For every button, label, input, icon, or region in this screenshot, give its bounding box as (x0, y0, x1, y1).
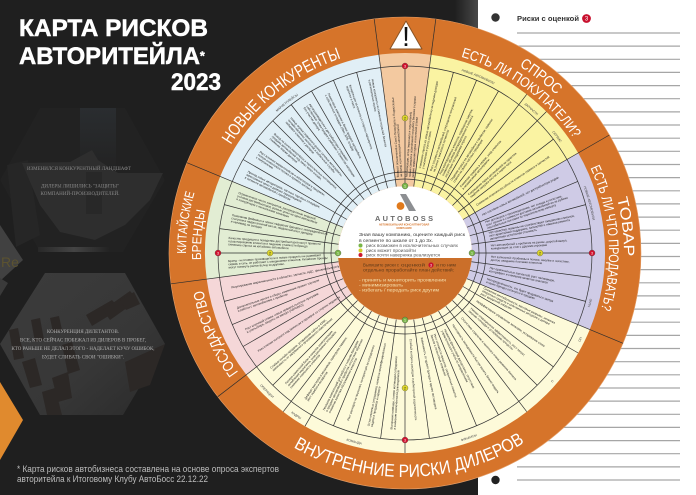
title: 2023 (171, 69, 221, 96)
text: new competitors segment risks: Конкуренция за клиента со стороны каршеринга, (348, 84, 374, 150)
text: warning segment risks: новые санкции и ограничения на работу бизнеса в стране (408, 96, 417, 177)
text block: competition of amateurs: ВСЕ, КТО СЕЙЧАС ПОБЕЖАЛ ИЗ ДИЛЕРОВ В ПРОБЕГ, (20, 336, 147, 344)
footnote: * Карта рисков автобизнеса составлена на основе опроса экспертов (17, 464, 279, 474)
text block: competition of amateurs: БУДЕТ СЛИВАТЬ СВОИ "ОШИБКИ". (42, 354, 124, 360)
text: internal dealer risks, left part: кадров в продажах и сервисе (370, 386, 382, 427)
panel: dark left background (0, 0, 478, 495)
heading: demand: ЕСТЬ ЛИ ПОКУПАТЕЛИ? (462, 48, 581, 136)
risk score markers: 3 (591, 251, 593, 255)
text: product segment risks (481, 176, 576, 306)
text block: changed competitive landscape (27, 164, 132, 197)
text block: competition of amateurs (12, 329, 155, 360)
text: chinese brands segment risks: статусом и недостаточной сетью, неудачный опыт дилеров (231, 216, 313, 236)
text: product segment risks: Нет качества: машины не соответствуют ожиданиям клиентов, (488, 214, 575, 235)
image: falling wooden blocks in hexagon (0, 273, 165, 415)
text: product segment risks: рост сроков и стоимости доставки автомобилей из-за рубежа (486, 195, 569, 227)
text: new competitors segment risks (244, 79, 388, 215)
risk score markers: 2 (404, 386, 406, 390)
text: demand segment risks: отсутствие господдержки спроса (444, 135, 468, 178)
text: action plan: оценкой (401, 262, 426, 268)
text: internal dealer risks, left part: и продажи автомобилей с пробегом, отсутствие обучения (325, 338, 364, 412)
text: product segment risks: долгое ожидание поставки клиентом (491, 258, 542, 265)
segment: government (207, 262, 352, 375)
outer-band small labels: НОВЫЕ АВТОМОБИЛИ (584, 186, 595, 220)
icon: warning triangle: ! (402, 21, 410, 52)
risk score markers: 1 (337, 251, 339, 255)
icon: warning triangle (390, 21, 422, 52)
text: action plan: 3 (430, 264, 432, 268)
risk score markers (215, 63, 595, 443)
text: action plan: - избегать / передать риск другим (359, 288, 439, 292)
text: internal dealer risks, right part: Снижение рентабельности, кассовые разрывы, нехватка (483, 286, 556, 325)
text: new competitors segment risks: Новые игроки сервисного рынка: сетевые автосервисы, (289, 116, 344, 178)
text: internal dealer risks, left part: снижение лояльности клиентов (289, 353, 321, 389)
segment: chinese brands (205, 176, 343, 279)
text block: competition of amateurs: КТО РАНЬШЕ НЕ ДЕЛАЛ ЭТОГО - НАДЕЛАЕТ КУЧУ ОШИБОК, (12, 346, 155, 352)
text: internal dealer risks, right part: Зависимость от одного бренда и одного поставщика (420, 337, 438, 410)
panel: centre circle (338, 186, 472, 320)
segment: demand (414, 55, 578, 220)
outer-band small labels: ЗАПЧ (588, 298, 592, 308)
text: government segment risks: и утильсбора, запреты на импорт (АВТОВАЗ) (246, 303, 304, 334)
risk score markers: 1 (404, 184, 406, 188)
text: internal dealer risks, left part: Слабые онлайн-продажи, устаревшие сайты и CRM, (269, 318, 327, 370)
text: internal dealer risks, left part: снижение качества обслуживания клиентов (328, 357, 358, 414)
text: internal dealer risks, right part: Низкая операционная эффективность, рост затрат, (470, 307, 526, 357)
outer-band small labels: КАДРЫ (291, 411, 302, 419)
text: new competitors segment risks: снижение маржи дилеров (269, 137, 299, 164)
segment: internal dealer risks (246, 279, 590, 453)
text: internal dealer risks, left part: Потеря клиентской базы и каналов коммуникации, (284, 329, 334, 385)
risk score markers: 3 (404, 64, 406, 68)
legend: risk scores (358, 243, 459, 258)
text: warning segment risks: Мобилизация, отток персонала и покупателей, (404, 111, 413, 177)
text: internal dealer risks, right part (409, 286, 556, 421)
footnote: авторитейла к Итоговому Клубу АвтоБосс 22.12.22 (17, 474, 208, 484)
heading: product: ЕСТЬ ЛИ ЧТО ПРОДАВАТЬ? (590, 164, 619, 311)
outer-band small labels: П (551, 380, 554, 383)
text: product segment risks: и какие бренды останутся в продаже (485, 280, 536, 300)
text: new competitors segment risks: в сегменте автомобилей с пробегом (244, 176, 291, 201)
text: demand segment risks: Рост стоимости автомобилей, сокращение покупателей (429, 96, 458, 172)
text: action plan: и по ним (436, 262, 456, 268)
text: internal dealer risks, left part: и снижение вовлечённости руководителей (393, 370, 401, 430)
text: chinese brands segment risks: снижение спроса на китайские автомобили (228, 242, 289, 250)
text: product segment risks: нет гарантийной поддержки, запчастей и навыков ремонта (489, 218, 571, 238)
text block: changed competitive landscape: ДИЛЕРЫ ЛИШИЛИСЬ "ЗАЩИТЫ" (41, 184, 119, 190)
text: government segment risks: Дополнительные налоги и сборы, изменение правил торговли (236, 278, 320, 310)
logo: autoboss (375, 194, 433, 230)
text: internal dealer risks, left part: рост ошибок и возвратов (306, 370, 329, 402)
text: internal dealer risks, right part: Отсутствие стратегии и понятного плана развития бизнеса (460, 316, 518, 381)
text: warning segment risks (391, 95, 420, 177)
heading: demand: СПРОС (521, 59, 562, 93)
segment: new competitors (220, 55, 396, 227)
text: demand segment risks: падение загрузки постов и нормо-часа (469, 160, 513, 199)
text: warning segment risks: резкие изменения курса и ключевой ставки (411, 117, 419, 177)
text: chinese brands segment risks: Ограниченное число контрактов, распределение моделей, (238, 191, 317, 221)
outer-band small labels: КОМАНДА (346, 438, 362, 445)
heading: chinese brands: БРЕНДЫ (192, 210, 206, 260)
text: action plan: - минимизировать (359, 282, 404, 288)
outer-band small labels: НОВЫЕ АВТОМОБИЛИ (462, 69, 494, 84)
text: demand segment risks: Снижение спроса на новые автомобили из-за падения доходов (418, 80, 439, 169)
risk score markers: 1 (404, 318, 406, 322)
text: product segment risks: Нет договоров с производителем, нет склада и логистики, (485, 194, 563, 224)
risk score markers: 3 (404, 438, 406, 442)
text: internal dealer risks, left part: Отток ключевых сотрудников, нехватка квалифицированных (367, 342, 387, 427)
risk score markers: 2 (269, 251, 271, 255)
outer-band small labels: ЗАПЧАСТИ (524, 103, 538, 116)
text: internal dealer risks, right part: Рост стоимости кредитов, ограничение лимитов (433, 333, 458, 398)
outer-band small labels: ОП (578, 337, 582, 342)
image: grey hexagon fragment with logo (0, 225, 110, 296)
heading: new competitors: НОВЫЕ КОНКУРЕНТЫ (222, 48, 340, 144)
outer-band small labels: ОПЕРАЦИИ (260, 384, 274, 398)
text: government segment risks: Регулирование маржинальности в областях: запчасти, НДС, финансовые услуги (231, 263, 343, 289)
text: chinese brands segment risks: и неликвид на складах (230, 219, 263, 230)
text: demand segment risks (418, 80, 550, 207)
text: chinese brands segment risks: Появление фейковых и новых недорогих брендов с неопределённым (232, 213, 328, 236)
text: product segment risks: нестабильные поставки по параллельному импорту (487, 203, 557, 230)
text: new competitors segment risks: подписки и такси (345, 85, 357, 109)
text: product segment risks: контрафакт и снижение качества аналогов (489, 269, 549, 285)
text: new competitors segment risks: онлайн-магазины запчастей и мобильные службы (287, 118, 336, 174)
heading: risks rated 3: 3 (585, 17, 589, 23)
panel: notes page with ruled lines (478, 0, 696, 495)
text: new competitors segment risks: забирают клиентов у дилеров (285, 121, 315, 155)
text: product segment risks: Нет оригинальных запчастей, рост неликвидов, (489, 266, 555, 283)
text: new competitors segment risks: Рост влияния маркетплейсов и агрегаторов в продажах, (259, 150, 326, 197)
outer-band small labels: ФИНАНСЫ (461, 434, 477, 441)
text: rate each risk instruction (359, 231, 466, 243)
text: demand segment risks: у населения и роста ставок (421, 130, 432, 169)
text: chinese brands segment risks: условия дистрибьюторов, разные цены на одни автомобили (237, 194, 318, 225)
heading: internal dealer risks: ВНУТРЕННИЕ РИСКИ ДИЛЕРОВ (294, 434, 523, 477)
text: internal dealer risks, right part: банков и лизинговых компаний (430, 334, 447, 377)
outer-band small labels: СЕРВИС (552, 131, 562, 142)
icon: binder hole top (491, 13, 500, 22)
outer-band small labels: МАРКЕТПЛЕЙСЫ (276, 94, 298, 112)
risk score markers: 2 (404, 116, 406, 120)
text: rate each risk instruction: в сегменте по шкале от 1 до 3х. (359, 238, 433, 243)
heading: risks rated 3: Риски с оценкой (517, 14, 579, 23)
text: internal dealer risks, right part: оборотных средств и собственных ресурсов у дилера (481, 289, 551, 326)
text: new competitors segment risks: без участия дилера (303, 106, 321, 132)
text: chinese brands segment risks: и конкуренция с несколькими каналами (236, 197, 290, 219)
title: АВТОРИТЕЙЛА (19, 42, 200, 70)
text: internal dealer risks, left part: Рост расходов на персонал, конкуренция за сотрудников (346, 344, 376, 421)
text: demand segment risks: Сокращение парка автомобилей на гарантии, (467, 151, 518, 196)
icon: orange hexagon fragment (0, 382, 23, 460)
text: government segment risks: и работы с автомобилями с пробегом (237, 292, 288, 313)
text: product segment risks: непонятная остаточная стоимость (490, 228, 538, 241)
text: action plan: отдельно проработайте план действий: (363, 266, 454, 272)
text: government segment risks: Ужесточение контроля над бизнесом и проверок со стороны ведомств (257, 295, 341, 353)
text: product segment risks: Неопределённость: что будет продаваться завтра (486, 277, 554, 303)
text: internal dealer risks, right part: Неготовность менеджмента быстро менять бизнес-модель (451, 323, 500, 394)
text: new competitors segment risks: с собственных площадок (Sber, ВТБ, Альфа) (324, 94, 355, 152)
outer-band small labels (260, 69, 595, 445)
text: demand segment risks: Снижение платежеспособности клиентов сервиса и запчастей (475, 155, 550, 207)
text: action plan: - принять и мониторить проявления (359, 278, 447, 282)
text: demand segment risks: Падение спроса на автомобили с пробегом, перенос (449, 117, 494, 181)
text: demand segment risks: на рынке в массовых сегментах (432, 129, 450, 173)
text: internal dealer risks, right part: управленческого учёта по направлениям (440, 330, 469, 383)
text: new competitors segment risks: Приход новых автодилеров, частных торговых площадок, (247, 170, 321, 209)
text: new competitors segment risks: собственные точки продаж и работают с клиентом напрямую (305, 105, 356, 178)
text: new competitors segment risks: с покупателем (255, 155, 274, 170)
segment: product (463, 153, 605, 330)
text: internal dealer risks, left part: Нехватка компетенций для работы с новыми брендами (322, 340, 360, 411)
text: demand segment risks: Уход корпоративных клиентов, сокращение закупок, (438, 108, 474, 175)
text: government segment risks (231, 263, 343, 353)
text: demand segment risks: в независимые автосервисы (461, 158, 490, 190)
text: chinese brands segment risks (228, 191, 328, 269)
text: internal dealer risks, right part: Неэффективное управление запасами, устаревание стока (475, 299, 546, 348)
text: product segment risks: Нет запчастей: проблемы в поиске, закупке и логистике, (491, 255, 570, 264)
text: product segment risks: Нет автомобилей с пробегом на рынке, дорогой выкуп, (491, 238, 568, 247)
text block: changed competitive landscape: ИЗМЕНИЛСЯ КОНКУРЕНТНЫЙ ЛАНДШАФТ (27, 164, 132, 172)
footnote (17, 464, 279, 484)
text: new competitors segment risks: продажа автомобилей под заказ через онлайн, (271, 135, 323, 181)
text: internal dealer risks, left part (269, 314, 401, 430)
heading: product: ТОВАР (618, 196, 634, 256)
text block: changed competitive landscape: КОМПАНИЙ-ПРОИЗВОДИТЕЛЕЙ. (40, 189, 120, 197)
risk score markers: 2 (539, 251, 541, 255)
text: chinese brands segment risks: могут покинуть рынок вслед за другими. (228, 262, 285, 269)
title: КАРТА РИСКОВ (19, 15, 208, 42)
legend: risk scores: риск может произойти (366, 248, 417, 253)
logo: autoboss: АВТОМОБИЛЬНАЯ КОНСАЛТИНГОВАЯ (379, 222, 429, 226)
text: new competitors segment risks: потеря клиентского потока и прямого контакта (257, 153, 313, 192)
text: internal dealer risks, left part: Дефицит мастеров и механиков, перегрузка сервиса, (303, 336, 348, 400)
icon: binder hole bottom (491, 476, 500, 484)
text: warning segment risks: Возврат ограничений в Санкт-Петербурге и Подмосковье (391, 97, 400, 177)
text: government segment risks: Рост ключевой ставки, новые правила льготных программ (244, 292, 319, 331)
legend: risk scores: риск возможен в исключительных случаях (366, 243, 459, 248)
heading: government: ГОСУДАРСТВО (194, 292, 238, 378)
wheel: orange outer ring (169, 17, 641, 489)
text: internal dealer risks, left part: ослабление маркетинга, уход рекламных площадок (287, 330, 338, 387)
text: internal dealer risks, right part: Слабый контроль расходов и дебиторской задолженности (409, 339, 418, 421)
text: action plan (359, 262, 456, 292)
logo: autoboss: AUTOBOSS (375, 214, 433, 223)
text: action plan: Выпишите риски с (363, 262, 400, 268)
text: internal dealer risks, left part: зависимость от зарубежного программного обеспечения (271, 317, 334, 372)
text: internal dealer risks, right part: Нехватка финансовой дисциплины, отсутствие (443, 328, 476, 389)
logo: autoboss: КОМПАНИЯ (396, 226, 412, 230)
image: hand with hourglass in hexagon (0, 108, 165, 252)
text: product segment risks: Нет поставок новых автомобилей, нет дистрибьютора рядом (481, 176, 559, 217)
heading: chinese brands (176, 190, 206, 260)
text: demand segment risks: снижение объёмов автокредитования и лизинга (441, 115, 474, 177)
heading: product (590, 164, 634, 311)
text: chinese brands segment risks: к разочарованию клиентов и падению стоимости бренда (228, 239, 308, 248)
text: internal dealer risks, left part: Выгорание команды, потеря мотивации сотрудников (389, 356, 398, 430)
segment: warning (379, 53, 431, 187)
text: new competitors segment risks: Новые конкуренты из смежных отраслей бизнеса (370, 79, 388, 148)
text: new competitors segment risks: Автопроизводители и дистрибьюторы открывают (308, 103, 350, 162)
text block: competition of amateurs: КОНКУРЕНЦИЯ ДИЛЕТАНТОВ. (47, 329, 119, 335)
text: internal dealer risks, right part: лишние площади и устаревшие процессы (468, 309, 514, 351)
risk score markers: 1 (471, 251, 473, 255)
text: new competitors segment risks: Лизинговые компании и банки продают автомобили (327, 92, 362, 159)
text: chinese brands segment risks: сервис и сеть, не работают с ожиданиями клиентов. Китайские бренды (228, 256, 328, 266)
text: chinese brands segment risks: Бренд - неготовые производители и новые продукты не развивают (228, 253, 322, 263)
text: demand segment risks: спроса на рынок частных продавцов (452, 138, 484, 183)
text: new competitors segment risks: Выход на рынок импортёров и параллельных поставщиков, (273, 132, 338, 190)
text: warning segment risks: на въезд и регистрацию автомобилей (396, 124, 403, 177)
text: chinese brands segment risks: Качество продукции и поведение дистрибьюторов могут привести (228, 236, 321, 246)
risk wheel (168, 16, 642, 490)
title: * (200, 49, 205, 63)
text: new competitors segment risks: и региональные игроки (367, 79, 378, 112)
risk score markers: 3 (217, 251, 219, 255)
text: rate each risk instruction: Зная вашу компанию, оцените каждый риск (359, 231, 466, 237)
text: internal dealer risks, right part: рост кредитной нагрузки (480, 292, 513, 311)
text: product segment risks: конкуренция за сток с другими игроками (491, 243, 548, 251)
image: grey hexagon fragment with logo: Re (1, 254, 19, 270)
heading: chinese brands: КИТАЙСКИЕ (176, 190, 194, 253)
text: new competitors segment risks: агрессивные цены и демпинг перекупщиков (246, 173, 303, 204)
title (19, 15, 221, 96)
text: demand segment risks: Снижение трафика в сервис, уход клиентов (459, 139, 502, 188)
legend: risk scores: риск почти наверняка реализуется (366, 252, 440, 258)
